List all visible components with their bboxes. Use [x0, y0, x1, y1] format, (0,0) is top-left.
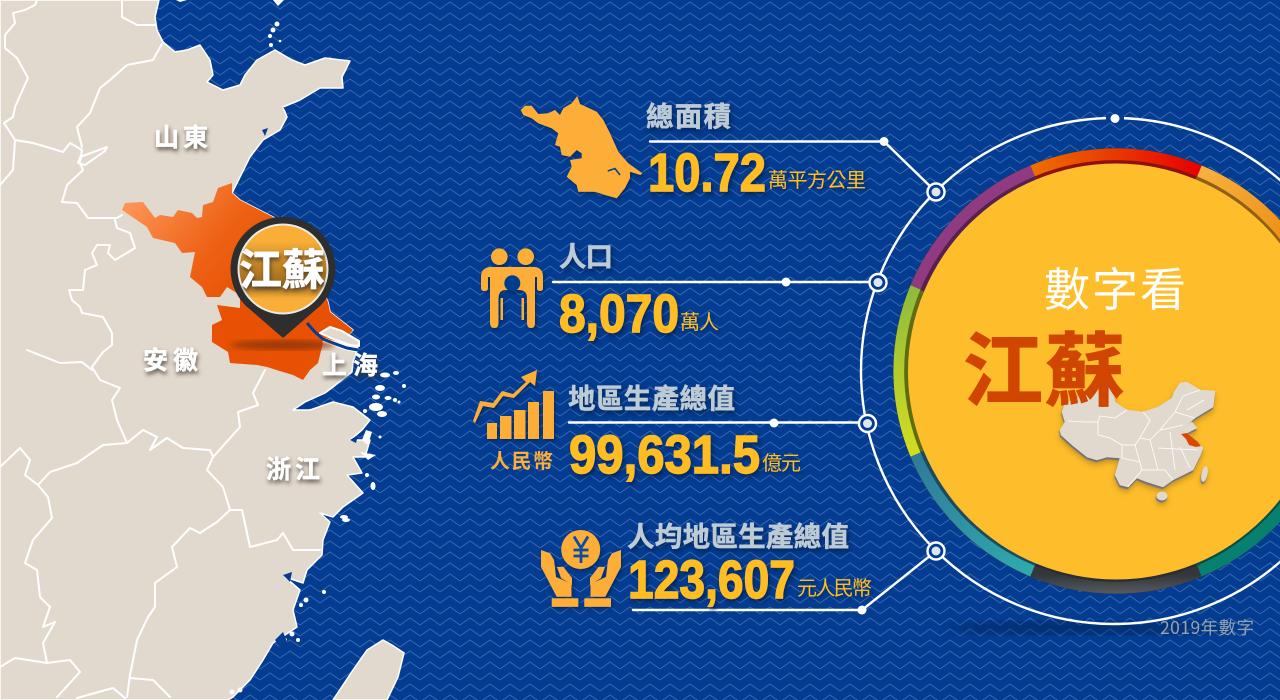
icon: hands holding yuan coin: [541, 530, 621, 607]
label: Anhui: 安徽: [143, 341, 198, 377]
map: province borders: [0, 0, 320, 698]
value: 123,607: [628, 550, 795, 610]
label: Zhejiang: 浙江: [266, 450, 320, 486]
value: 99,631.5: [569, 425, 760, 485]
title: 數字看: 數字看: [1044, 254, 1186, 320]
icon: family: [481, 248, 543, 328]
ring inner dark edge: [906, 162, 1280, 580]
map: mainland land mass: [0, 0, 370, 700]
stat: population: [481, 234, 719, 344]
unit: 元人民幣: [797, 572, 872, 601]
footnote: 2019年數字: 2019年數字: [1160, 615, 1254, 640]
pin shadow: [231, 340, 335, 350]
label: Shanghai: 上海: [322, 346, 378, 382]
connector: area: [650, 137, 944, 200]
shadow under circle: [950, 622, 1230, 634]
heading: 總面積: [646, 94, 731, 134]
connector: population: [553, 274, 886, 291]
pin label: 江蘇: [239, 236, 325, 298]
icon caption: 人民幣: [490, 445, 553, 474]
china mini map: [1060, 382, 1215, 500]
stat: total area: [521, 94, 866, 203]
unit: 萬人: [680, 306, 719, 335]
china map: Jiangsu highlight: [1181, 433, 1201, 447]
big circle: multicolour ring and yellow disc: [893, 148, 1280, 594]
heading: 人口: [559, 234, 613, 274]
title: 江蘇: 江蘇: [963, 307, 1125, 423]
value: 10.72: [648, 143, 766, 203]
outer white orbit ring: [861, 114, 1280, 624]
stat: GDP per capita: [541, 514, 872, 610]
map: Yangtze channel: [323, 340, 358, 350]
pin body: [231, 217, 335, 338]
map pin: Jiangsu: [231, 217, 335, 350]
china map: Hainan and Taiwan: [1156, 492, 1168, 500]
yellow disc: [908, 164, 1280, 580]
stat: GDP: [473, 370, 801, 485]
unit: 億元: [762, 447, 801, 476]
map: Chongming island: [320, 327, 359, 346]
icon: rising bar chart: [473, 370, 554, 439]
value: 8,070: [559, 284, 679, 344]
icon: Jiangsu silhouette: [521, 96, 642, 198]
map: east China provinces: [0, 0, 406, 700]
connector: GDP: [569, 415, 876, 432]
map: coastal inlets: [262, 107, 358, 648]
label: Shandong: 山東: [154, 118, 208, 154]
ring segments: [900, 155, 1280, 587]
map: northern islands: [176, 0, 284, 47]
map: Jiangsu province highlight: [122, 183, 359, 380]
map: Taiwan: [333, 640, 404, 700]
unit: 萬平方公里: [768, 164, 866, 193]
map: Zhoushan and south-east islands: [230, 371, 406, 694]
heading: 地區生產總值: [568, 376, 735, 416]
connector: GDP per capita: [633, 542, 944, 614]
heading: 人均地區生產總值: [627, 514, 849, 554]
china map: provincial lines: [1068, 390, 1204, 487]
